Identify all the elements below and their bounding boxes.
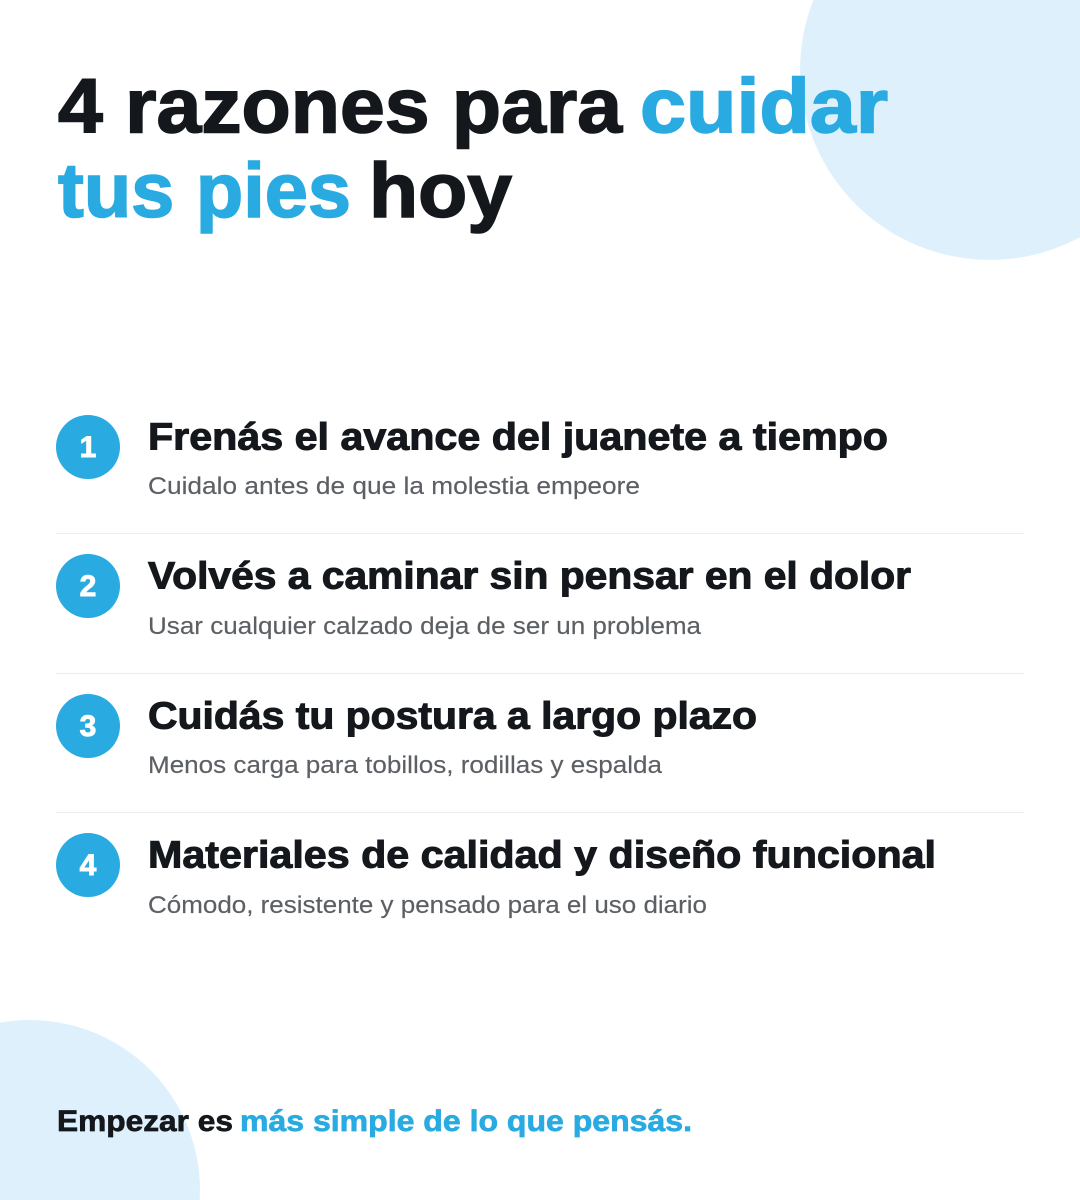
footer tagline: Empezar es bbox=[57, 1105, 233, 1138]
decorative circle: bottom left bbox=[0, 1020, 200, 1200]
decorative circle: top right bbox=[800, 0, 1080, 260]
reason 3 bbox=[56, 694, 757, 779]
heading 3: Cuidás tu postura a largo plazo bbox=[148, 696, 757, 738]
footer tagline bbox=[57, 1105, 692, 1138]
number badge 3: 3 bbox=[80, 710, 96, 743]
description 2: Usar cualquier calzado deja de ser un problema bbox=[148, 613, 701, 640]
reason 4 bbox=[56, 833, 936, 919]
title: 4 razones para bbox=[58, 64, 623, 150]
footer tagline: más simple de lo que pensás. bbox=[240, 1105, 692, 1138]
title: tus pies bbox=[58, 148, 351, 234]
title: cuidar bbox=[640, 64, 888, 150]
number badge 2: 2 bbox=[80, 570, 96, 603]
number badge 1: 1 bbox=[80, 431, 96, 464]
reason 2 bbox=[56, 554, 911, 640]
description 1: Cuidalo antes de que la molestia empeore bbox=[148, 473, 640, 500]
title bbox=[58, 64, 888, 234]
description 4: Cómodo, resistente y pensado para el uso diario bbox=[148, 892, 707, 919]
number badge 3 bbox=[56, 694, 120, 758]
heading 2: Volvés a caminar sin pensar en el dolor bbox=[148, 556, 911, 598]
title: hoy bbox=[369, 148, 512, 234]
reason 1 bbox=[56, 415, 888, 500]
number badge 4 bbox=[56, 833, 120, 897]
heading 1: Frenás el avance del juanete a tiempo bbox=[148, 417, 888, 459]
number badge 4: 4 bbox=[80, 849, 97, 882]
description 3: Menos carga para tobillos, rodillas y espalda bbox=[148, 752, 662, 779]
number badge 1 bbox=[56, 415, 120, 479]
number badge 2 bbox=[56, 554, 120, 618]
heading 4: Materiales de calidad y diseño funcional bbox=[148, 835, 936, 877]
